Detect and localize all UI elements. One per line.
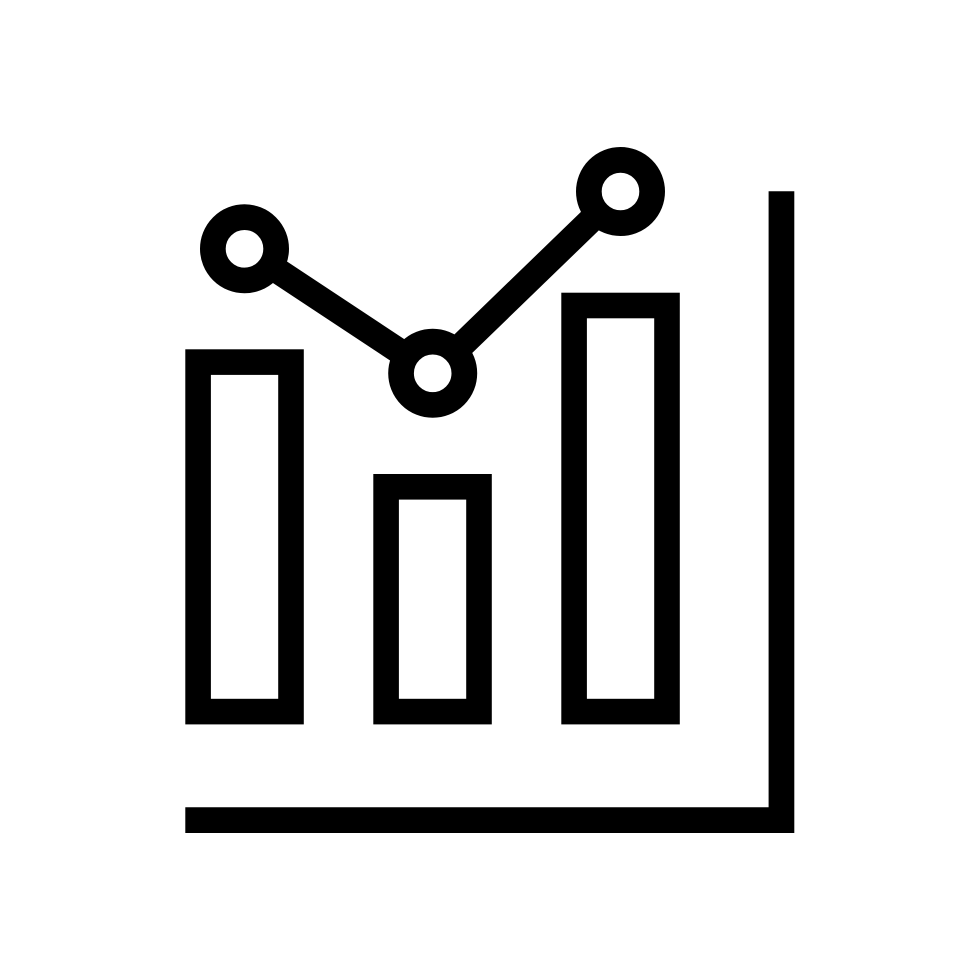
bar: left: [198, 362, 291, 712]
axis: L-shaped frame: [185, 191, 794, 833]
marker: right point: [589, 160, 652, 223]
trend line: [244, 192, 620, 373]
marker: left point: [213, 217, 276, 280]
bar: middle: [386, 487, 479, 712]
marker: middle point: [401, 342, 464, 405]
bar: right: [574, 306, 667, 712]
